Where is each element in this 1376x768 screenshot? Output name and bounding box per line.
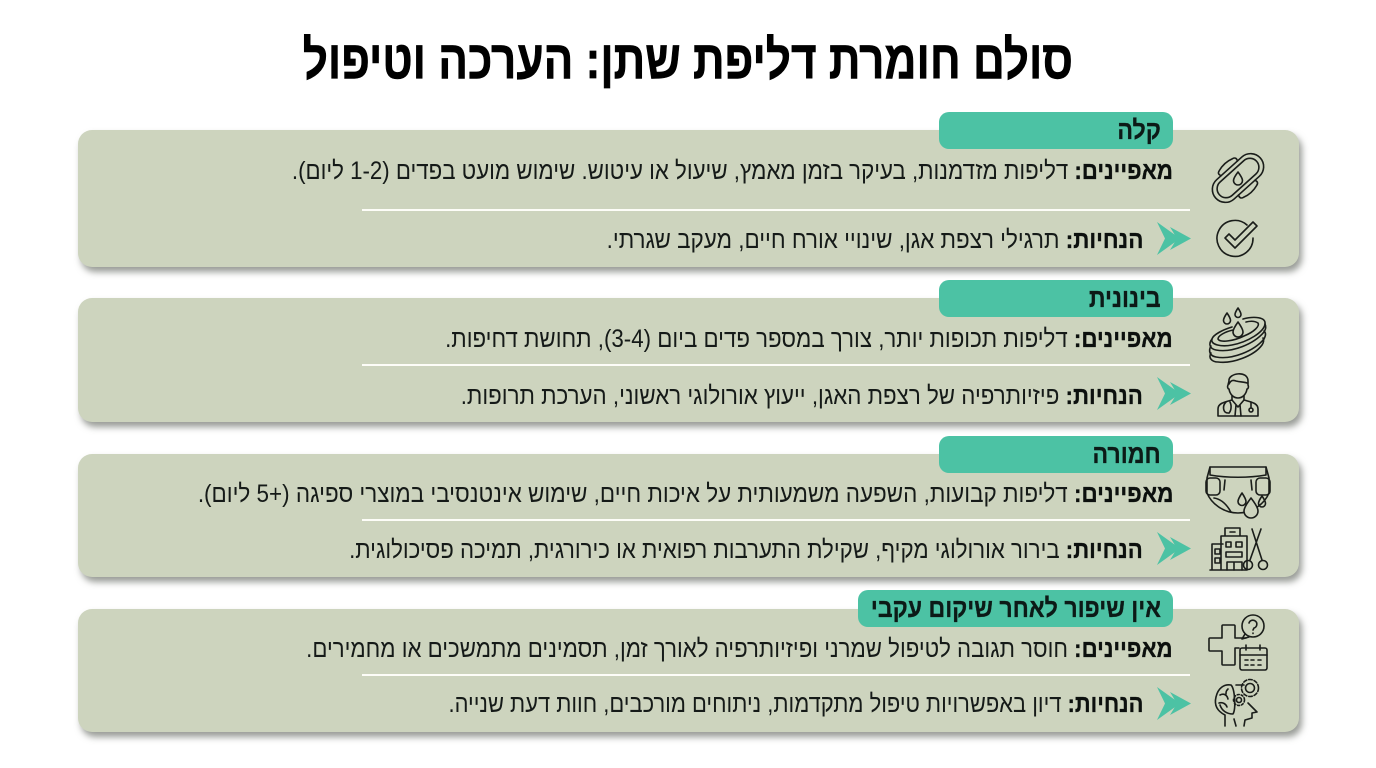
arrow: severe	[1157, 532, 1191, 565]
tab: moderate	[939, 280, 1173, 317]
text: no improvement characteristics: מאפיינים: חוסר תגובה לטיפול שמרני ופיזיותרפיה לאורך זמן, תסמינים מתמשכים או מחמירים.	[307, 635, 1173, 663]
icon: diaper	[1205, 466, 1271, 519]
tab: moderate: בינונית	[1089, 283, 1161, 313]
text: mild characteristics: מאפיינים: דליפות מזדמנות, בעיקר בזמן מאמץ, שיעול או עיטוש. שימוש מועט בפדים (1-2 ליום).	[292, 157, 1173, 185]
icon: check mark	[1216, 220, 1258, 258]
icon: doctor	[1217, 373, 1259, 417]
title: סולם חומרת דליפת שתן: הערכה וטיפול	[303, 30, 1073, 90]
arrow: no improvement	[1157, 687, 1191, 720]
tab: no improvement: אין שיפור לאחר שיקום עקבי	[871, 593, 1161, 623]
tab: mild: קלה	[1117, 115, 1161, 145]
text: moderate recommendations: הנחיות: פיזיותרפיה של רצפת האגן, ייעוץ אורולוגי ראשוני, הערכת תרופות.	[461, 382, 1143, 410]
tab: mild	[939, 112, 1173, 149]
tab: severe: חמורה	[1093, 439, 1161, 469]
icon: stacked pads	[1208, 307, 1266, 364]
panel: no improvement	[78, 609, 1299, 732]
arrow: moderate	[1157, 377, 1191, 410]
icon: sanitary pad	[1212, 152, 1264, 204]
panel: mild	[78, 130, 1299, 267]
panel: severe	[78, 454, 1299, 577]
icon: head with brain and gears	[1214, 678, 1260, 727]
icon: medical cross, question and calendar	[1208, 614, 1268, 671]
text: no improvement recommendations: הנחיות: דיון באפשרויות טיפול מתקדמות, ניתוחים מורכבים, חוות דעת שנייה.	[448, 690, 1143, 718]
arrow: mild	[1157, 222, 1191, 255]
text: mild recommendations: הנחיות: תרגילי רצפת אגן, שינויי אורח חיים, מעקב שגרתי.	[606, 226, 1143, 254]
icon: hospital and scissors	[1209, 527, 1268, 571]
text: moderate characteristics: מאפיינים: דליפות תכופות יותר, צורך במספר פדים ביום (3-4), תחושת דחיפות.	[445, 325, 1173, 353]
text: severe characteristics: מאפיינים: דליפות קבועות, השפעה משמעותית על איכות חיים, שימוש אינטנסיבי במוצרי ספיגה (+5 ליום).	[197, 480, 1173, 508]
text: severe recommendations: הנחיות: בירור אורולוגי מקיף, שקילת התערבות רפואית או כירורגית, תמיכה פסיכולוגית.	[349, 536, 1143, 564]
tab: severe	[939, 436, 1173, 473]
panel: moderate	[78, 298, 1299, 422]
